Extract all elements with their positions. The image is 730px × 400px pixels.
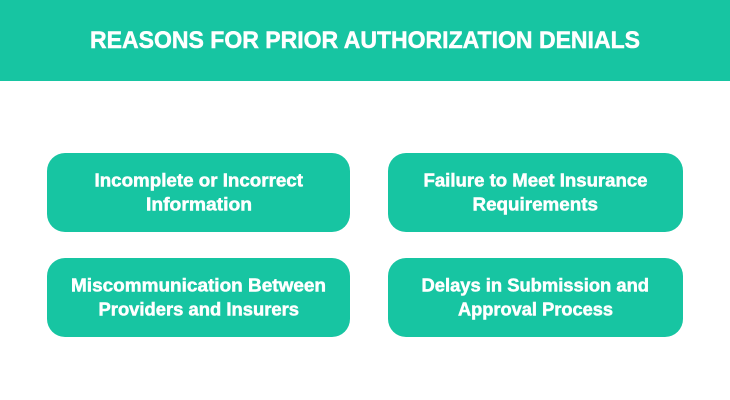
card: incomplete or incorrect information: Information: [146, 194, 252, 214]
card: failure to meet insurance requirements: Failure to Meet Insurance: [424, 170, 648, 190]
card: incomplete or incorrect information: Incomplete or Incorrect: [94, 170, 303, 190]
card: miscommunication between providers and insurers: Providers and Insurers: [98, 300, 299, 320]
card: miscommunication between providers and insurers: [47, 258, 350, 337]
card: incomplete or incorrect information: [47, 153, 350, 232]
card: delays in submission and approval process: Approval Process: [458, 300, 613, 320]
card: failure to meet insurance requirements: [388, 153, 683, 232]
card: delays in submission and approval process: [388, 258, 683, 337]
title: REASONS FOR PRIOR AUTHORIZATION DENIALS: [90, 27, 640, 54]
header banner: [0, 0, 730, 81]
card: delays in submission and approval process: Delays in Submission and: [422, 276, 649, 296]
card: failure to meet insurance requirements: Requirements: [472, 194, 598, 214]
card: miscommunication between providers and insurers: Miscommunication Between: [71, 276, 326, 296]
